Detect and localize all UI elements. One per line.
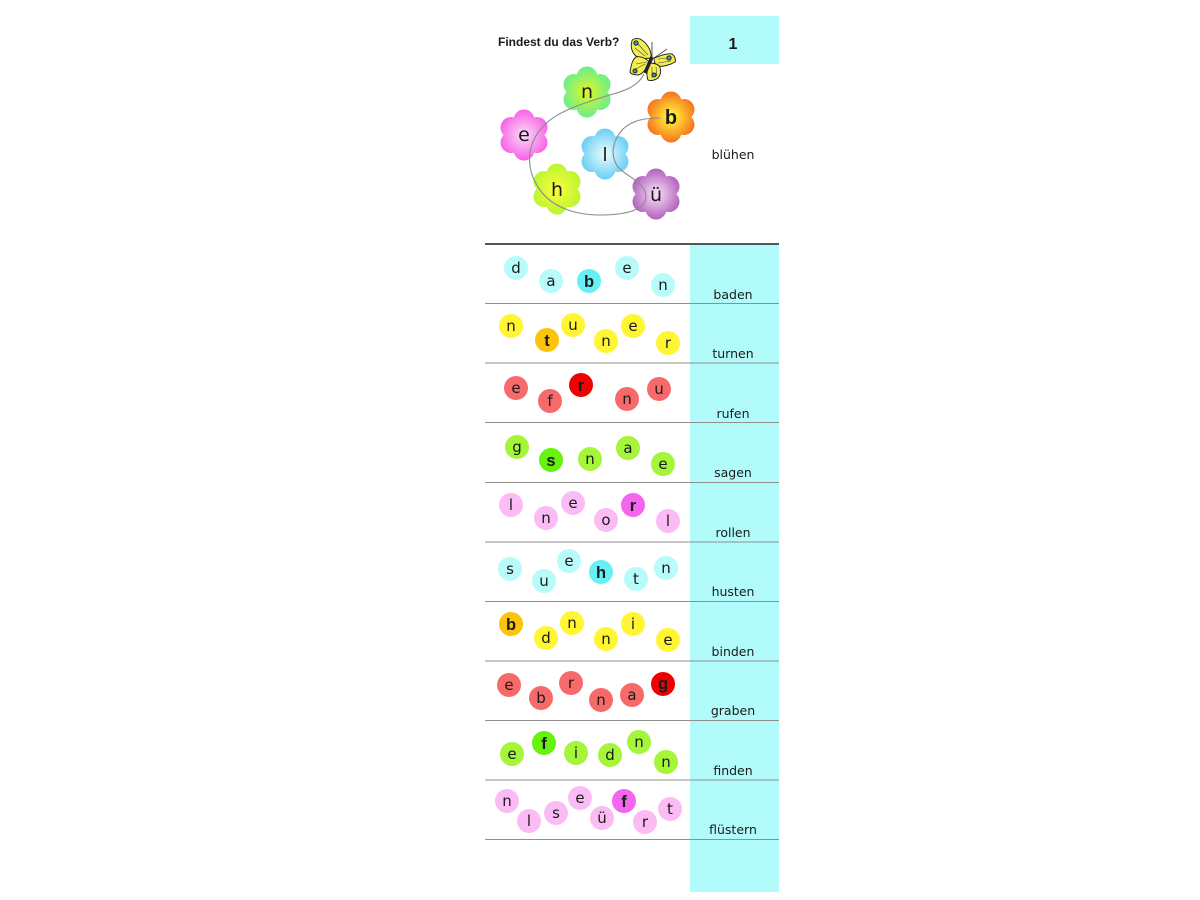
row 6: husten: n <box>661 559 671 577</box>
row 3: rufen: e <box>511 379 521 397</box>
number box: 1 <box>729 36 738 53</box>
row 10: flüstern: t <box>667 800 673 818</box>
row 2: turnen: n <box>506 317 516 335</box>
row 8: graben: b <box>536 689 546 707</box>
flower: l <box>582 128 628 180</box>
row 5: rollen: l <box>666 512 670 530</box>
number box <box>690 16 779 64</box>
row 10: flüstern: ü <box>597 809 607 827</box>
divider lines <box>485 243 779 840</box>
row 2: turnen: u <box>568 316 578 334</box>
row 6: husten: husten <box>712 584 754 599</box>
row 4: sagen: g <box>512 438 522 456</box>
row 2: turnen: r <box>665 334 672 352</box>
row 10: flüstern: l <box>527 812 531 830</box>
row 7: binden: n <box>601 630 611 648</box>
row 7: binden: d <box>541 629 551 647</box>
row 9: finden: e <box>507 745 517 763</box>
row 1: baden: a <box>546 272 556 290</box>
row 7: binden: binden <box>712 644 754 659</box>
row 6: husten: u <box>539 572 549 590</box>
icon: butterfly <box>630 39 675 81</box>
row 8: graben <box>497 671 755 718</box>
row 1: baden: b <box>584 273 594 291</box>
row 10: flüstern: flüstern <box>709 822 757 837</box>
row 9: finden: d <box>605 746 615 764</box>
row 1: baden: baden <box>713 287 753 302</box>
row 6: husten: h <box>596 564 606 582</box>
row 9: finden: i <box>574 744 578 762</box>
row 10: flüstern: n <box>502 792 512 810</box>
row 2: turnen: e <box>628 317 638 335</box>
row 6: husten: e <box>564 552 574 570</box>
row 9: finden: n <box>634 733 644 751</box>
row 9: finden: n <box>661 753 671 771</box>
flower: ü: ü <box>650 184 662 206</box>
row 10: flüstern: s <box>552 804 560 822</box>
row 10: flüstern <box>495 786 757 837</box>
flower: e: e <box>518 124 530 146</box>
row 9: finden: finden <box>713 763 753 778</box>
row 2: turnen: n <box>601 332 611 350</box>
row 8: graben: a <box>627 686 637 704</box>
row 10: flüstern: r <box>642 813 649 831</box>
row 10: flüstern: e <box>575 789 585 807</box>
row 4: sagen <box>505 435 752 480</box>
row 4: sagen: a <box>623 439 633 457</box>
row 5: rollen: l <box>509 496 513 514</box>
row 4: sagen: sagen <box>714 465 752 480</box>
row 1: baden <box>504 256 753 302</box>
flower: b <box>648 92 694 142</box>
row 2: turnen: t <box>544 332 550 350</box>
row 4: sagen: n <box>585 450 595 468</box>
row 7: binden <box>499 611 754 659</box>
row 9: finden: f <box>541 735 547 753</box>
example answer: blühen <box>712 147 754 162</box>
row 10: flüstern: f <box>621 793 627 811</box>
row 1: baden: n <box>658 276 668 294</box>
flower: b: b <box>665 107 677 129</box>
butterfly flight path <box>530 74 660 215</box>
row 3: rufen: n <box>622 390 632 408</box>
row 3: rufen: f <box>547 392 553 410</box>
row 3: rufen <box>504 373 750 421</box>
row 3: rufen: rufen <box>716 406 750 421</box>
row 4: sagen: s <box>546 452 556 470</box>
flower: h: h <box>551 179 563 201</box>
row 8: graben: graben <box>711 703 755 718</box>
row 1: baden: d <box>511 259 521 277</box>
row 5: rollen: rollen <box>715 525 751 540</box>
row 6: husten <box>498 549 754 599</box>
row 5: rollen: r <box>630 497 637 515</box>
row 7: binden: b <box>506 616 516 634</box>
flower: ü <box>632 168 680 220</box>
answer column <box>690 244 779 892</box>
row 2: turnen <box>499 313 754 361</box>
row 8: graben: e <box>504 676 514 694</box>
row 7: binden: e <box>663 631 673 649</box>
row 3: rufen: r <box>578 377 585 395</box>
row 9: finden <box>500 730 753 778</box>
row 8: graben: n <box>596 691 606 709</box>
row 1: baden: e <box>622 259 632 277</box>
row 8: graben: g <box>658 675 668 693</box>
row 7: binden: i <box>631 615 635 633</box>
flower: h <box>534 164 580 214</box>
row 5: rollen: e <box>568 494 578 512</box>
row 4: sagen: e <box>658 455 668 473</box>
flower: e <box>500 110 548 160</box>
row 7: binden: n <box>567 614 577 632</box>
heading: Findest du das Verb? <box>498 35 619 49</box>
row 6: husten: t <box>633 570 639 588</box>
flower: n <box>564 66 610 118</box>
row 5: rollen: o <box>601 511 611 529</box>
row 3: rufen: u <box>654 380 664 398</box>
flower: n: n <box>581 81 593 103</box>
row 5: rollen <box>499 491 751 540</box>
row 5: rollen: n <box>541 509 551 527</box>
row 8: graben: r <box>568 674 575 692</box>
flower: l: l <box>602 144 608 166</box>
row 2: turnen: turnen <box>712 346 754 361</box>
row 6: husten: s <box>506 560 514 578</box>
